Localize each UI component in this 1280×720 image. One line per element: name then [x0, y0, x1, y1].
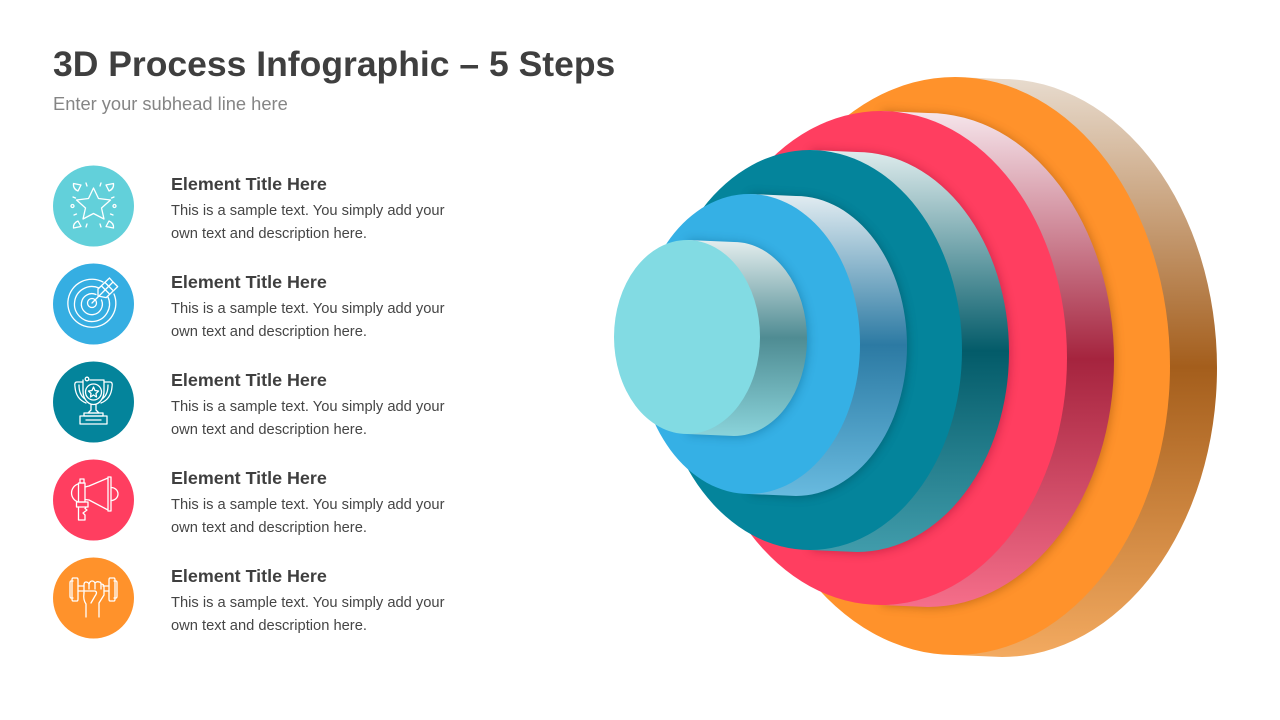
- text: element 5: own text and description here.: [171, 618, 367, 634]
- subhead: Enter your subhead line here: [53, 93, 288, 114]
- text: element 4: Element Title Here: [171, 468, 327, 488]
- text: element 3: This is a sample text. You simply add your: [171, 399, 444, 415]
- text: element 2: Element Title Here: [171, 272, 327, 292]
- text: element 2: [171, 272, 444, 340]
- icon: trophy: [53, 362, 134, 442]
- text: element 5: Element Title Here: [171, 566, 327, 586]
- text: element 4: This is a sample text. You simply add your: [171, 497, 444, 513]
- text: element 2: This is a sample text. You simply add your: [171, 301, 444, 317]
- text: element 1: own text and description here.: [171, 226, 367, 242]
- disc 3: teal: [658, 150, 1010, 553]
- text: element 5: [171, 566, 444, 634]
- disc 4: red: [750, 106, 1120, 613]
- text: element 1: This is a sample text. You simply add your: [171, 203, 444, 219]
- text: element 3: Element Title Here: [171, 370, 327, 390]
- text: element 1: [171, 174, 444, 242]
- 3D stacked discs: [614, 77, 1217, 657]
- icon: dumbbell: [53, 558, 134, 638]
- icon: megaphone: [53, 460, 134, 540]
- text: element 1: Element Title Here: [171, 174, 327, 194]
- icon: star: [53, 166, 134, 246]
- text: element 5: This is a sample text. You simply add your: [171, 595, 444, 611]
- disc 5: orange: [740, 77, 1217, 657]
- text: element 4: own text and description here.: [171, 520, 367, 536]
- icon: target: [53, 264, 134, 344]
- disc 1: cyan: [614, 240, 808, 437]
- text: element 4: [171, 468, 444, 536]
- text: element 2: own text and description here.: [171, 324, 367, 340]
- title: 3D Process Infographic – 5 Steps: [53, 44, 615, 84]
- text: element 3: own text and description here.: [171, 422, 367, 438]
- disc 2: blue: [638, 194, 908, 497]
- text: element 3: [171, 370, 444, 438]
